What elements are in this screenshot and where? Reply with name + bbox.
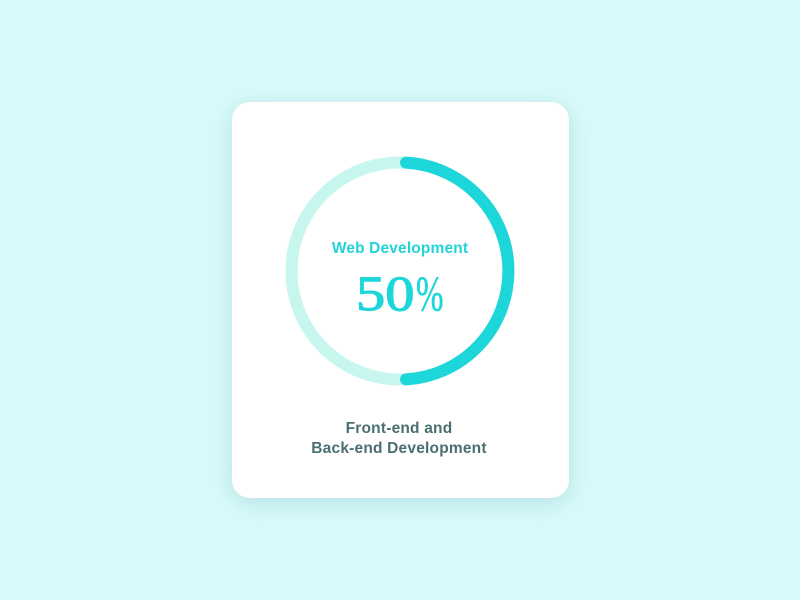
percentage value: % [416, 265, 443, 321]
card panel [232, 102, 569, 498]
caption: Back-end Development [311, 440, 487, 456]
chart label: Web Development [332, 240, 468, 257]
caption [311, 420, 487, 456]
caption: Front-end and [346, 420, 452, 437]
percentage value [356, 265, 443, 321]
percentage value: 50 [356, 265, 414, 321]
